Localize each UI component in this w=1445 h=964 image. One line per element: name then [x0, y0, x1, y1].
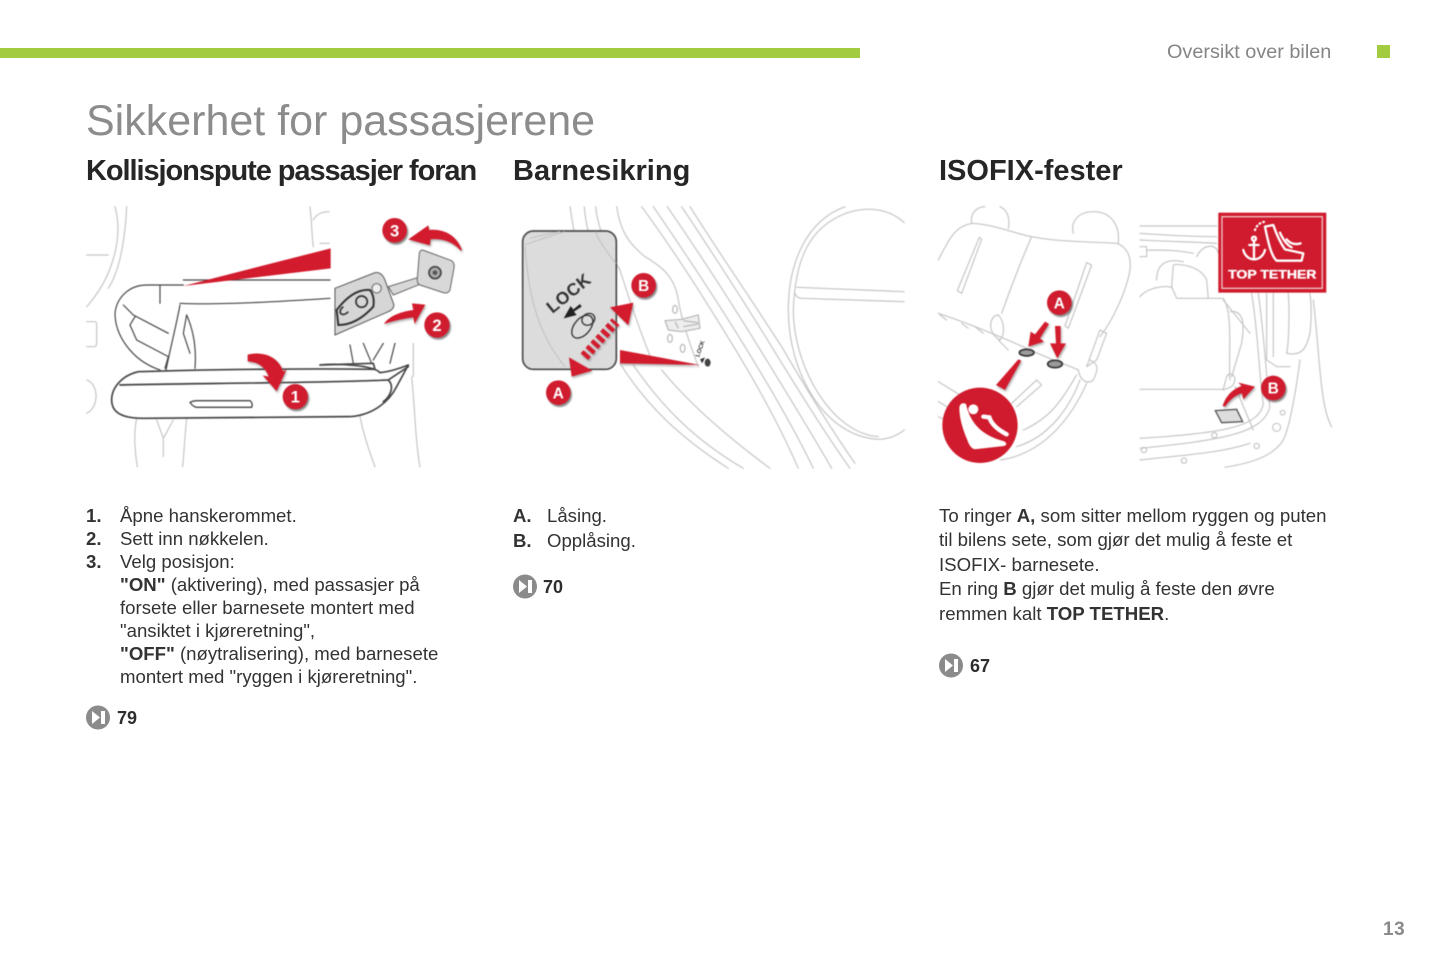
step 3: montert med "ryggen i kjøreretning".: [120, 666, 417, 687]
top tether cover: [1215, 409, 1243, 423]
dashboard outline: [87, 207, 420, 467]
item B: Opplåsing.: [547, 530, 636, 551]
double arrow A-B: [569, 303, 633, 377]
badge B: [1261, 376, 1286, 400]
badge 1: 1: [291, 388, 300, 407]
LOCK lettering: LOCK: [542, 269, 595, 317]
arrow 3: [408, 225, 462, 251]
child seat icon: [1255, 222, 1303, 261]
item A: Låsing.: [547, 505, 607, 526]
step 3: 3.: [86, 551, 102, 572]
door latch: [665, 305, 700, 352]
step 3: forsete eller barnesete montert med: [120, 597, 415, 618]
badge A: [546, 380, 571, 405]
text block: isofix: En ring B gjør det mulig å feste den øvre: [939, 578, 1275, 599]
red pointer wedge: [620, 350, 700, 365]
text block: child lock: [513, 505, 636, 551]
badge 2: 2: [432, 316, 442, 335]
title: Sikkerhet for passasjerene: [86, 97, 595, 145]
step 3: "ansiktet i kjøreretning",: [120, 620, 315, 641]
badge 3: [382, 218, 407, 243]
step 1: Åpne hanskerommet.: [120, 505, 297, 526]
badge 2: [424, 312, 450, 338]
text block: isofix: [939, 505, 1326, 624]
badge B: B: [1268, 381, 1279, 398]
badge B: B: [638, 278, 649, 295]
page reference 67: 67: [970, 656, 990, 676]
text block: isofix: ISOFIX- barnesete.: [939, 554, 1100, 575]
page reference 79: [86, 706, 137, 730]
page reference 67: [939, 654, 990, 678]
step 3: [86, 551, 438, 687]
item A: [513, 505, 607, 526]
badge 1: [283, 384, 308, 409]
small lock symbol: [695, 339, 711, 367]
lock knob icon: [568, 311, 597, 342]
badge B: [631, 273, 656, 298]
step 1: 1.: [86, 505, 102, 526]
step 3: Velg posisjon:: [120, 551, 235, 572]
text block: isofix: To ringer A, som sitter mellom ryggen og puten: [939, 505, 1326, 526]
step 3: "ON" (aktivering), med passasjer på: [120, 574, 420, 595]
lock direction arrow: [564, 304, 582, 318]
arrow 1: [248, 354, 287, 391]
top green bar: [0, 48, 860, 58]
red pointer wedge: [183, 248, 331, 286]
illustration: door child lock: [523, 207, 904, 468]
isofix round badge: [942, 388, 1018, 463]
anchor icon: [1243, 237, 1265, 259]
heading: isofix: ISOFIX-fester: [939, 155, 1123, 187]
page reference 70: 70: [543, 577, 563, 597]
illustration: glove box and key: [87, 207, 462, 467]
glove box interior: [115, 280, 395, 370]
arrow 2: [384, 303, 425, 324]
heading: airbag: Kollisjonspute passasjer foran: [86, 155, 476, 187]
boot interior outline: [1140, 226, 1332, 467]
small lock symbol: LOCK: [695, 339, 707, 358]
heading: child lock: Barnesikring: [513, 155, 690, 187]
badge A: A: [1054, 295, 1065, 312]
text block: airbag steps: [86, 505, 438, 687]
top tether sign: TOP TETHER: [1228, 267, 1317, 281]
red arrows to rings: [996, 322, 1066, 390]
badge A: [1047, 290, 1072, 315]
step 2: 2.: [86, 528, 102, 549]
page reference 79: 79: [117, 708, 137, 728]
badge A: A: [553, 385, 564, 402]
page number: 13: [1383, 919, 1405, 940]
isofix rings: [1019, 349, 1062, 368]
page reference 70: [513, 574, 563, 598]
key fob panel: [335, 273, 434, 335]
arrow to B: [1223, 383, 1255, 407]
top tether sign: [1218, 213, 1326, 293]
ignition switch plate: [417, 250, 454, 293]
badge 3: 3: [390, 221, 399, 240]
step 3: "OFF" (nøytralisering), med barnesete: [120, 643, 438, 664]
item A: A.: [513, 505, 532, 526]
section label: Oversikt over bilen: [1167, 41, 1331, 63]
item B: B.: [513, 530, 532, 551]
step 2: Sett inn nøkkelen.: [120, 528, 269, 549]
glove box lid: [112, 363, 408, 418]
text block: isofix: til bilens sete, som gjør det mulig å feste et: [939, 529, 1292, 550]
text block: isofix: remmen kalt TOP TETHER.: [939, 603, 1169, 624]
seat outline: [938, 207, 1130, 460]
illustration: isofix seat: [938, 207, 1332, 467]
magnified lock panel: [523, 231, 616, 369]
green square marker: [1377, 45, 1390, 58]
door and body lines: [570, 207, 904, 468]
